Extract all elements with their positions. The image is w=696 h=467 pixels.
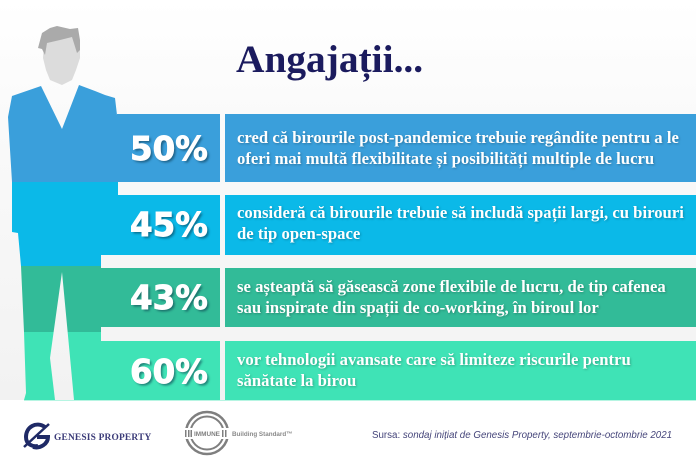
text row 1 [237,128,680,170]
icon: Immune logo: IMMUNE [194,431,221,438]
text row 2: consideră că birourile trebuie să includă spații largi, cu birouri [237,203,684,222]
panel: row 2 background [225,195,696,255]
source note: Sursa: sondaj inițiat de Genesis Property, septembrie-octombrie 2021 [372,430,672,441]
percentage 50: 50% [130,130,208,168]
icon: hair [38,26,80,55]
text row 4 [237,350,632,390]
percentage 60: 60% [130,353,208,391]
text row 2: de tip open-space [237,224,360,243]
footer rule [24,400,696,401]
text row 2 [237,203,685,244]
panel: row 4 background [225,341,696,400]
icon: body bands [8,85,118,400]
icon: Immune logo: Building Standard™ [232,431,293,438]
left bar segments [101,114,220,400]
text row 1: oferi mai multă flexibilitate și posibilități multiple de lucru [237,149,654,168]
text row 4: vor tehnologii avansate care să limiteze riscurile pentru [237,350,631,369]
text row 3: se așteaptă să găsească zone flexibile de lucru, de tip cafenea [237,277,666,296]
text row 4: sănătate la birou [237,371,356,390]
icon: Genesis Property logo [24,424,49,447]
percentage 45: 45% [130,206,208,244]
icon: Immune logo [184,412,293,454]
panel: row 1 background [225,114,696,182]
text row 1: cred că birourile post-pandemice trebuie regândite pentru a le [237,128,679,147]
Genesis Property logo text: GENESIS PROPERTY [54,433,151,443]
text row 3: sau inspirate din spații de co-working, în biroul lor [237,298,599,317]
icon: face [43,36,80,85]
text row 3 [237,277,667,318]
percentage 43: 43% [130,279,208,317]
panel: row 3 background [225,268,696,327]
title: Angajații... [236,37,423,81]
